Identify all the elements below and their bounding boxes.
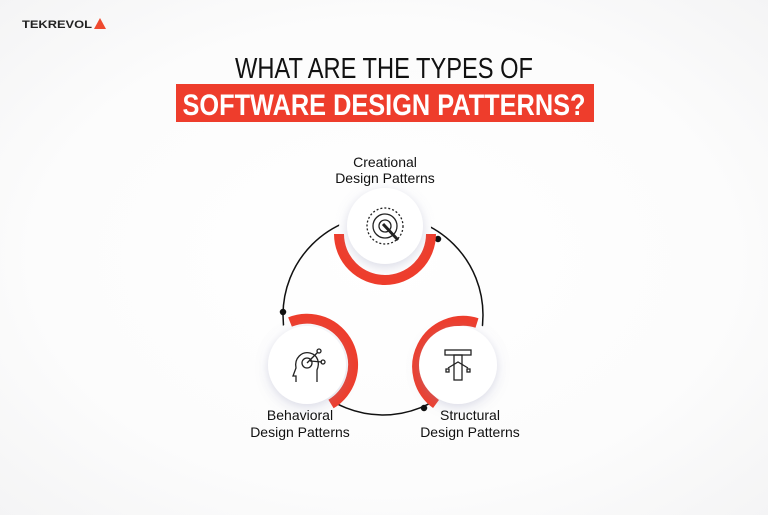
node: creational: Design Patterns <box>335 170 435 186</box>
logo <box>22 18 106 31</box>
node: behavioral: Design Patterns <box>250 424 350 440</box>
label: behavioral: Behavioral <box>267 407 333 423</box>
icon: gear with cursor <box>367 208 403 244</box>
icon: structure <box>445 350 471 380</box>
node: structural <box>412 319 520 440</box>
node: behavioral <box>250 319 353 440</box>
logo: TEKREVOL <box>22 19 92 31</box>
node: creational <box>335 154 435 280</box>
label: structural: Structural <box>440 407 500 423</box>
title highlight: SOFTWARE DESIGN PATTERNS? <box>182 89 586 122</box>
title: WHAT ARE THE TYPES OF <box>235 53 533 85</box>
label: creational: Creational <box>353 154 417 170</box>
icon: head <box>293 349 325 382</box>
node: structural: Design Patterns <box>420 424 520 440</box>
connecting cycle <box>280 215 483 415</box>
title <box>176 53 594 122</box>
